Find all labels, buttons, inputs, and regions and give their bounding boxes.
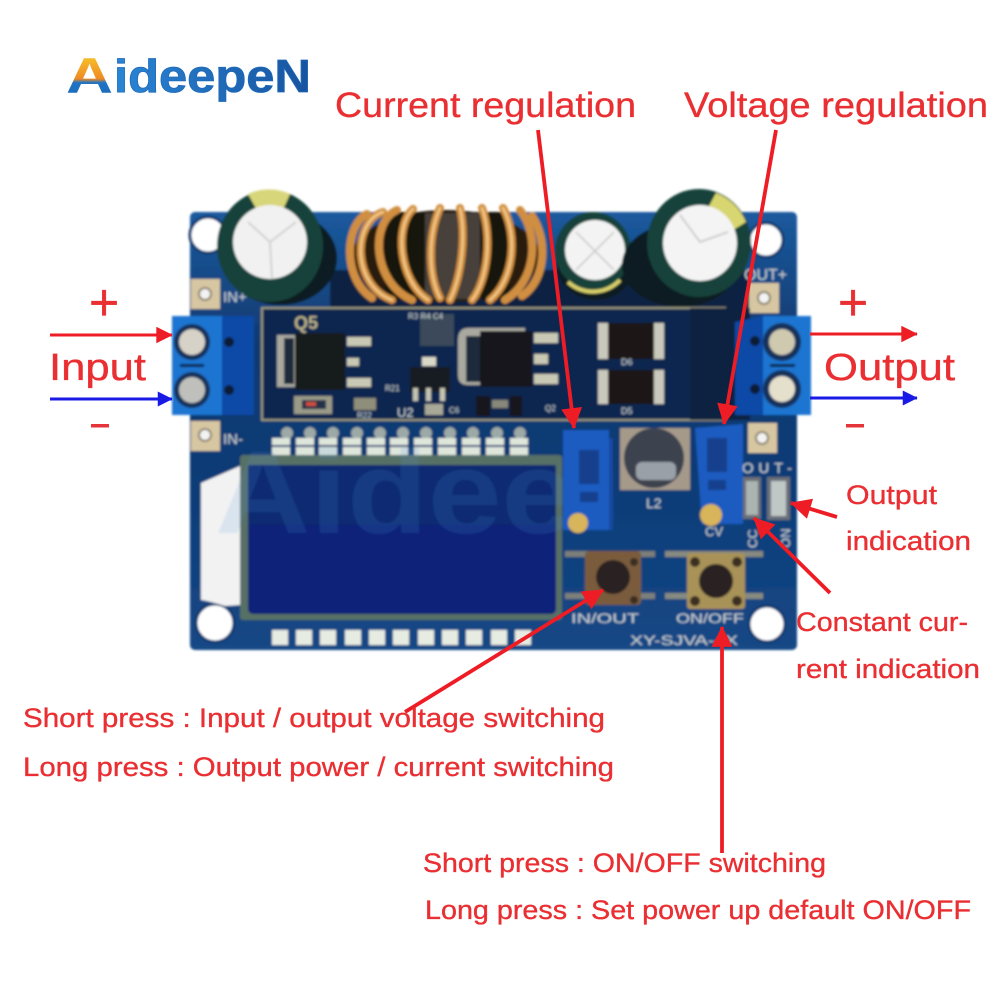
watermark logo: Aidee [215, 427, 575, 559]
text: IN/OUT button functions [23, 703, 614, 782]
small parts [294, 396, 332, 414]
power module frame: C6 [449, 406, 460, 415]
text: ON/OFF button functions [423, 848, 971, 925]
LCD white backing tab [201, 466, 240, 606]
arrow: ON/OFF button [720, 627, 724, 853]
power module frame: D6 [621, 357, 633, 367]
silkscreen labels: IN- [223, 431, 243, 448]
input polarity plus: + [89, 274, 119, 332]
logo: Aideepen: ideepeN [114, 50, 311, 102]
label: constant current indication [796, 607, 980, 684]
PCB base [190, 212, 797, 650]
label: output: Output [824, 347, 956, 389]
inductor L2 [620, 428, 690, 490]
silkscreen labels [223, 267, 793, 648]
heading: voltage regulation: Voltage regulation [684, 86, 988, 125]
silkscreen labels: IN+ [223, 289, 247, 306]
silkscreen labels: ON/OFF [676, 610, 744, 626]
silkscreen labels: ON [778, 528, 793, 548]
text: IN/OUT button functions: Long press : Output power / current switching [23, 752, 614, 782]
silkscreen labels: OUT- [742, 460, 792, 477]
label: output indication: Output [846, 480, 938, 510]
power module frame: U2 [397, 405, 414, 420]
trimmer: voltage regulation [695, 424, 743, 526]
text: ON/OFF button functions: Short press : ON/OFF switching [423, 848, 826, 878]
label: constant current indication: rent indication [796, 654, 980, 684]
label: constant current indication: Constant cur- [796, 607, 968, 637]
logo: Aideepen [66, 48, 311, 104]
text: ON/OFF button functions: Long press : Set power up default ON/OFF [425, 895, 971, 925]
large right capacitor [622, 189, 751, 307]
LCD pins top [272, 427, 528, 455]
label: output indication [846, 480, 971, 556]
inductor toroid [350, 208, 542, 302]
LCD screen [240, 455, 562, 620]
power module frame: Q2 [545, 404, 556, 413]
arrow: output positive [810, 332, 917, 336]
arrow: current regulation [538, 130, 574, 428]
power module frame: R21 [385, 384, 400, 393]
arrow: input positive [50, 334, 172, 336]
arrow: constant current indication [754, 518, 830, 593]
silkscreen labels: IN/OUT [571, 610, 640, 626]
label: input: Input [49, 347, 146, 389]
arrow: output negative [810, 396, 917, 400]
text: IN/OUT button functions: Short press : Input / output voltage switching [23, 703, 605, 733]
ON/OFF button [665, 551, 763, 609]
MOSFET right [458, 328, 525, 385]
output polarity minus [846, 424, 864, 428]
arrow: IN/OUT button [405, 590, 603, 712]
MOSFET left [277, 335, 295, 387]
IN/OUT button [565, 551, 655, 605]
silkscreen labels: L2 [646, 495, 662, 511]
status LEDs [743, 477, 790, 520]
silkscreen labels: OUT+ [744, 267, 787, 284]
silkscreen labels: XY-SJVA-4X [630, 632, 739, 648]
power module frame [262, 308, 750, 420]
right screw terminal [735, 316, 811, 415]
dark shading under capacitors [330, 270, 750, 310]
left screw terminal [172, 316, 254, 415]
power module frame: R22 [357, 411, 372, 420]
power module frame: D5 [621, 406, 633, 416]
small right capacitor [555, 212, 636, 300]
diodes [598, 323, 664, 359]
logo: Aideepen: A [66, 48, 113, 104]
silkscreen labels: CC [745, 529, 760, 548]
solder pads [191, 279, 779, 453]
trimmer: current regulation [563, 430, 613, 533]
circuit board photo [172, 189, 811, 650]
silkscreen labels: CV [705, 524, 723, 539]
LCD pins bottom [272, 630, 531, 645]
regulator U2 [410, 367, 450, 392]
heading: current regulation: Current regulation [335, 86, 636, 125]
mounting holes [190, 217, 785, 642]
label: output indication: indication [846, 526, 971, 556]
arrow: output indication [791, 503, 837, 517]
power module frame: R3 R4 C4 [408, 312, 444, 321]
silkscreen module: Q5 [294, 313, 318, 333]
left capacitor [217, 189, 337, 305]
input polarity minus [91, 424, 109, 428]
arrow: input negative [50, 398, 172, 400]
arrow: voltage regulation [724, 130, 776, 424]
output polarity plus: + [838, 274, 868, 332]
